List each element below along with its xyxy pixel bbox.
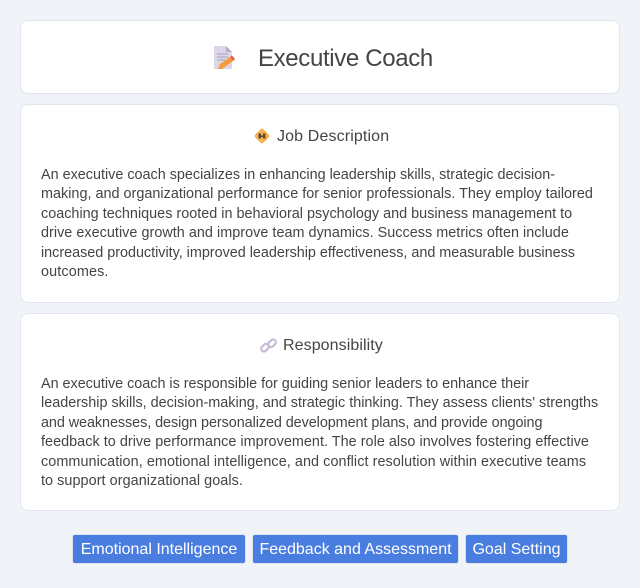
text block: responsibility: communication, emotional intelligence, and conflict resolution within executive teams	[41, 454, 586, 470]
text block: job description: making, and organizational performance for senior professionals. They employ tailored	[41, 186, 593, 202]
text block: job description: coaching techniques rooted in behavioral psychology and business management to	[41, 206, 572, 222]
heading: job description: Job Description	[277, 128, 389, 145]
text block: job description: An executive coach specializes in enhancing leadership skills, strategic decision-	[41, 167, 555, 183]
text block: responsibility: An executive coach is responsible for guiding senior leaders to enhance their	[41, 376, 529, 392]
tag: emotional intelligence: Emotional Intelligence	[81, 541, 237, 558]
heading: responsibility: Responsibility	[283, 337, 383, 354]
text block: job description: drive executive growth and improve team dynamics. Success metrics often include	[41, 225, 569, 241]
tag: goal setting	[465, 534, 568, 564]
tag: feedback and assessment: Feedback and Assessment	[259, 541, 452, 558]
text block: responsibility: to support organizational goals.	[41, 473, 243, 489]
text block: responsibility: feedback to drive performance improvement. The role also involves fostering effective	[41, 434, 589, 450]
tag: feedback and assessment	[252, 534, 459, 564]
icon: orange diamond	[254, 128, 270, 144]
tag: goal setting: Goal Setting	[472, 541, 561, 558]
text block: job description: outcomes.	[41, 264, 109, 280]
text block: responsibility: and weaknesses, design personalized development plans, and provide ongoing	[41, 415, 542, 431]
tag: emotional intelligence	[72, 534, 246, 564]
title: Executive Coach	[258, 45, 433, 72]
icon: document with pencil	[214, 46, 235, 69]
text block: responsibility: leadership skills, decision-making, and strategic thinking. They assess clients' strengths	[41, 395, 598, 411]
panel: job description	[20, 104, 620, 303]
icon: link	[260, 338, 277, 353]
text block: job description: increased productivity, improved leadership effectiveness, and measurable business	[41, 245, 575, 261]
panel: responsibility	[20, 313, 620, 511]
panel: title card	[20, 20, 620, 94]
